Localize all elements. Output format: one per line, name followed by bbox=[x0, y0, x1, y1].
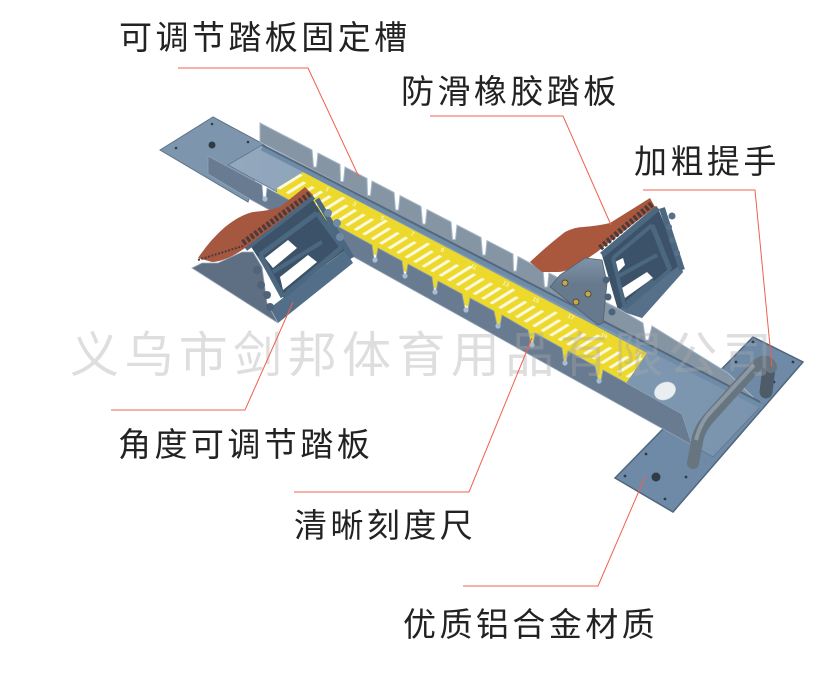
leader line: adjustable pedal bbox=[111, 302, 293, 410]
leader line: handle bbox=[643, 190, 772, 367]
leader line: groove bbox=[178, 68, 359, 177]
yellow graduated scale: 15 bbox=[531, 296, 540, 305]
right rubber pedal bbox=[530, 198, 655, 272]
yellow graduated scale: 7 bbox=[409, 231, 415, 239]
leader line: scale bbox=[294, 338, 532, 492]
left mounting plate bbox=[160, 117, 265, 202]
yellow graduated scale: 21 bbox=[634, 351, 643, 360]
label: groove: 可调节踏板固定槽 bbox=[119, 19, 411, 56]
leader line: rubber pedal bbox=[430, 116, 611, 225]
rail ridge bbox=[262, 145, 763, 407]
yellow graduated scale: 3 bbox=[351, 201, 357, 209]
round sticker on rail floor bbox=[651, 379, 679, 403]
right mounting plate bbox=[615, 337, 803, 512]
yellow graduated scale: 5 bbox=[379, 215, 385, 223]
yellow graduated scale: 13 bbox=[501, 280, 510, 289]
notch holes in near wall bbox=[262, 196, 602, 384]
label: scale: 清晰刻度尺 bbox=[294, 507, 476, 544]
yellow graduated scale: 17 bbox=[566, 313, 575, 322]
yellow graduated scale: 19 bbox=[599, 332, 608, 341]
yellow graduated scale bbox=[277, 172, 647, 392]
thick handle bbox=[693, 362, 771, 463]
right starting block frame bbox=[602, 208, 683, 318]
watermark: 义乌市剑邦体育用品有限公司 bbox=[70, 329, 777, 383]
label: handle: 加粗提手 bbox=[634, 143, 780, 180]
far slotted wall with adjustment notches bbox=[260, 123, 753, 402]
yellow graduated scale: 9 bbox=[439, 247, 445, 255]
label: aluminium material: 优质铝合金材质 bbox=[403, 606, 658, 643]
left starting block bbox=[192, 187, 353, 323]
right side plate with brass bolts bbox=[550, 258, 616, 325]
yellow graduated scale: 11 bbox=[469, 263, 478, 272]
rail floor bbox=[228, 145, 763, 457]
label: adjustable pedal: 角度可调节踏板 bbox=[118, 426, 373, 463]
near slotted wall bbox=[208, 156, 692, 445]
label: rubber pedal: 防滑橡胶踏板 bbox=[401, 73, 620, 110]
yellow graduated scale: 1 bbox=[324, 186, 330, 194]
leader line: aluminium material bbox=[463, 477, 645, 586]
